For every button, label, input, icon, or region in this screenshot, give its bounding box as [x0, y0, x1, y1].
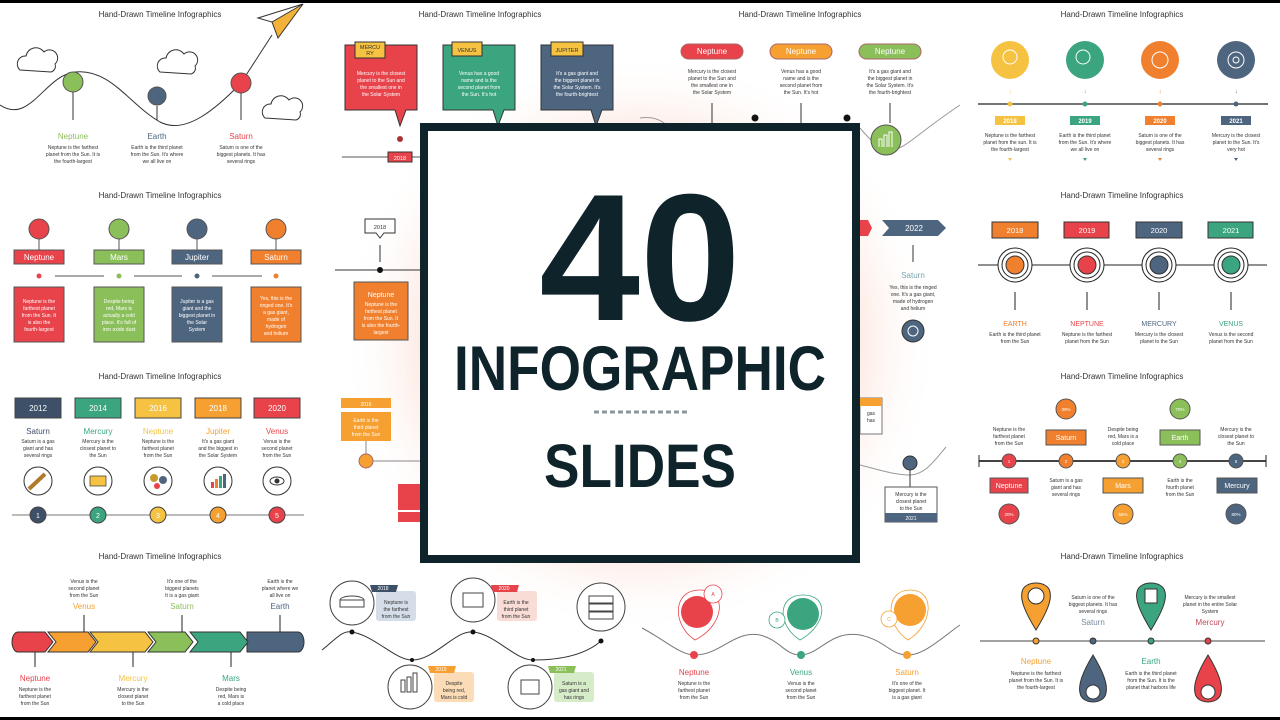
panel: speech bubbles top-mid-left: [342, 10, 613, 162]
panel: icon circles top-right: the fourth-largest: [991, 147, 1030, 153]
panel: chevron bar left: Venus is the: [70, 579, 98, 585]
panel: pills wave top-mid-right: the smallest one in: [691, 83, 733, 89]
panel: partial right-middle slides: has: [867, 418, 876, 424]
panel: percentage timeline right: Saturn: [1056, 435, 1076, 442]
panel: icon circles top-right: ↓: [1158, 89, 1162, 95]
panel: chevron bar left: It's one of the: [167, 579, 197, 585]
panel: wave timeline top-left: from the Sun. It's where: [131, 152, 184, 158]
panel: pills wave top-mid-right: Neptune: [697, 47, 728, 56]
panel: coin wave bottom-mid-left: 2019: [435, 667, 447, 673]
panel: percentage timeline right: 55%: [1118, 512, 1128, 517]
panel: wave timeline top-left: several rings: [227, 159, 256, 165]
panel: speech bubbles top-mid-left: the biggest planet in: [555, 78, 600, 84]
panel: icon boxes left: is also the: [28, 320, 50, 326]
panel: pills wave top-mid-right: Hand-Drawn Timeline Infographics: [739, 10, 861, 19]
panel: wave timeline top-left: planet from the Sun. It is: [46, 152, 101, 158]
panel: percentage timeline right: red, Mars is a: [1108, 434, 1138, 440]
panel: bubble wave bottom-mid-right: Neptune is the: [678, 681, 710, 687]
panel: pills wave top-mid-right: Neptune: [786, 47, 817, 56]
title: 40: 40: [539, 157, 741, 359]
panel: map pins right: Saturn is one of the: [1071, 595, 1115, 601]
panel: chevron bar left: closest planet: [118, 694, 149, 700]
panel: percentage timeline right: Mercury is the: [1220, 427, 1252, 433]
panel: bubble wave bottom-mid-right: farthest planet: [678, 688, 710, 694]
panel: percentage timeline right: Earth: [1172, 435, 1188, 442]
panel: speech bubbles top-mid-left: the fourth-brightest: [556, 92, 599, 98]
panel: partial right-middle slides: [860, 220, 946, 522]
panel: speech bubbles top-mid-left: JUPITER: [556, 48, 578, 54]
center title box: [424, 127, 856, 559]
panel: concentric circles right: Neptune is the farthest: [1062, 332, 1113, 338]
panel: icon boxes left: place. It's full of: [102, 320, 137, 326]
panel: year icons left: giant and has: [23, 446, 54, 452]
panel: chevron bar left: Despite being: [216, 687, 247, 693]
panel: pills wave top-mid-right: the fourth-brightest: [869, 90, 912, 96]
panel: partial right-middle slides: Saturn: [901, 271, 925, 280]
panel: wave timeline top-left: Neptune: [58, 132, 89, 141]
panel: icon boxes left: Despite being: [104, 299, 135, 305]
panel: year icons left: Neptune is the: [142, 439, 174, 445]
panel: icon boxes left: the Solar: [187, 320, 207, 326]
panel: pills wave top-mid-right: name and is the: [783, 76, 819, 82]
panel: year icons left: 2018: [209, 404, 227, 413]
panel: icon boxes left: Hand-Drawn Timeline Infographics: [99, 191, 221, 200]
panel: map pins right: Hand-Drawn Timeline Infographics: [1061, 552, 1183, 561]
panel: map pins right: planet that harbors life: [1126, 685, 1176, 691]
panel: percentage timeline right: giant and has: [1051, 485, 1082, 491]
panel: pills wave top-mid-right: planet to the Sun and: [688, 76, 736, 82]
title: SLIDES: SLIDES: [544, 432, 736, 500]
panel: partial left-middle slides: from the Sun: [352, 432, 381, 438]
panel: wave timeline top-left: the fourth-largest: [54, 159, 93, 165]
panel: chevron bar left: Neptune: [20, 674, 51, 683]
panel: speech bubbles top-mid-left: MERCU: [360, 45, 380, 51]
panel: year icons left: several rings: [24, 453, 53, 459]
panel: concentric circles right: planet from the Sun: [1065, 339, 1109, 345]
panel: bubble wave bottom-mid-right: Venus is the: [787, 681, 815, 687]
panel: icon circles top-right: several rings: [1146, 147, 1175, 153]
panel: speech bubbles top-mid-left: the Solar System. It's: [553, 85, 601, 91]
panel: map pins right: Mercury: [1196, 618, 1224, 627]
panel: bubble wave bottom-mid-right: second planet: [785, 688, 817, 694]
panel: map pins right: Mercury is the smallest: [1184, 595, 1236, 601]
panel: partial left-middle slides: Neptune is the: [365, 302, 397, 308]
panel: speech bubbles top-mid-left: the smallest one in: [360, 85, 402, 91]
panel: icon circles top-right: 2018: [1003, 119, 1017, 125]
panel: partial right-middle slides: gas: [867, 411, 876, 417]
panel: coin wave bottom-mid-left: from the Sun: [502, 614, 531, 620]
panel: pills wave top-mid-right: It's a gas giant and: [869, 69, 911, 75]
panel: year icons left: 2: [96, 513, 100, 520]
panel: icon circles top-right: 2019: [1078, 119, 1092, 125]
icon: paper plane: [258, 4, 303, 30]
panel: partial left-middle slides: farthest planet: [365, 309, 397, 315]
panel: partial left-middle slides: [335, 219, 420, 522]
panel: icon boxes left: iron oxide dust: [103, 327, 136, 333]
panel: year icons left: 2014: [89, 404, 107, 413]
panel: icon circles top-right: [978, 10, 1268, 161]
panel: icon boxes left: Neptune: [24, 253, 55, 262]
panel: year icons left: Mercury: [84, 427, 112, 436]
panel: chevron bar left: Mars: [222, 674, 240, 683]
panel: year icons left: Jupiter: [206, 427, 230, 436]
panel: chevron bar left: a cold place: [218, 701, 245, 707]
panel: pills wave top-mid-right: second planet from: [780, 83, 822, 89]
panel: coin wave bottom-mid-left: third planet: [504, 607, 529, 613]
panel: icon boxes left: Jupiter: [185, 253, 209, 262]
top black bar: [0, 0, 1280, 3]
panel: percentage timeline right: 5: [1235, 459, 1238, 464]
panel: coin wave bottom-mid-left: 2020: [498, 586, 510, 592]
panel: icon circles top-right: biggest planets. It has: [1136, 140, 1185, 146]
panel: percentage timeline right: Neptune: [996, 483, 1022, 490]
panel: year icons left: the Solar System: [199, 453, 237, 459]
panel: year icons left: [12, 372, 304, 523]
panel: chevron bar left: Hand-Drawn Timeline Infographics: [99, 552, 221, 561]
panel: pills wave top-mid-right: the Solar System. It's: [866, 83, 914, 89]
panel: year icons left: It's a gas giant: [202, 439, 235, 445]
panel: year icons left: second planet: [261, 446, 293, 452]
panel: concentric circles right: EARTH: [1003, 321, 1027, 328]
panel: percentage timeline right: from the Sun: [1166, 492, 1195, 498]
panel: icon boxes left: a gas giant,: [263, 310, 289, 316]
panel: concentric circles right: MERCURY: [1141, 321, 1177, 328]
panel: map pins right: Neptune is the farthest: [1011, 671, 1062, 677]
panel: chevron bar left: from the Sun: [21, 701, 50, 707]
panel: coin wave bottom-mid-left: Earth is the: [503, 600, 529, 606]
panel: bubble wave bottom-mid-right: It's one of the: [892, 681, 922, 687]
panel: icon boxes left: giant and the: [183, 306, 212, 312]
panel: year icons left: 2016: [149, 404, 167, 413]
panel: speech bubbles top-mid-left: name and is the: [461, 78, 497, 84]
panel: wave timeline top-left: biggest planets. It has: [217, 152, 266, 158]
panel: percentage timeline right: farthest planet: [993, 434, 1025, 440]
panel: partial right-middle slides: closest planet: [896, 499, 927, 505]
panel: chevron bar left: Mercury is the: [117, 687, 149, 693]
panel: speech bubbles top-mid-left: 2018: [394, 156, 406, 162]
panel: chevron bar left: Saturn: [170, 602, 194, 611]
panel: year icons left: Neptune: [143, 427, 174, 436]
panel: coin wave bottom-mid-left: has rings: [564, 695, 585, 701]
panel: concentric circles right: 2019: [1079, 226, 1095, 235]
panel: icon boxes left: [14, 191, 301, 342]
panel: percentage timeline right: 80%: [1231, 512, 1241, 517]
panel: percentage timeline right: from the Sun: [995, 441, 1024, 447]
panel: coin wave bottom-mid-left: 2018: [377, 586, 389, 592]
panel: wave timeline top-left: Saturn: [229, 132, 253, 141]
panel: concentric circles right: VENUS: [1219, 321, 1243, 328]
panel: icon circles top-right: very hot: [1227, 147, 1245, 153]
panel: speech bubbles top-mid-left: It's a gas giant and: [556, 71, 598, 77]
panel: bubble wave bottom-mid-right: A: [711, 592, 715, 598]
panel: pills wave top-mid-right: the biggest planet in: [868, 76, 913, 82]
panel: concentric circles right: 2018: [1007, 226, 1023, 235]
panel: partial right-middle slides: 2022: [905, 224, 923, 233]
panel: speech bubbles top-mid-left: Venus has a good: [459, 71, 499, 77]
panel: bubble wave bottom-mid-right: is a gas giant: [892, 695, 922, 701]
panel: partial left-middle slides: is also the fourth-: [362, 323, 401, 329]
panel: pills wave top-mid-right: Venus has a good: [781, 69, 821, 75]
panel: icon circles top-right: ↓: [1234, 89, 1238, 95]
panel: speech bubbles top-mid-left: Mercury is the closest: [357, 71, 406, 77]
panel: coin wave bottom-mid-left: gas giant and: [559, 688, 589, 694]
panel: partial right-middle slides: one. It's a gas giant,: [891, 292, 935, 298]
panel: bubble wave bottom-mid-right: B: [775, 618, 779, 624]
panel: bubble wave bottom-mid-right: C: [887, 617, 891, 623]
panel: coin wave bottom-mid-left: Saturn is a: [562, 681, 586, 687]
panel: wave timeline top-left: Saturn is one of the: [219, 145, 263, 151]
panel: year icons left: 3: [156, 513, 160, 520]
panel: map pins right: Earth: [1141, 657, 1161, 666]
panel: pills wave top-mid-right: the Solar System: [693, 90, 731, 96]
panel: chevron bar left: planet where we: [262, 586, 298, 592]
panel: icon boxes left: System: [189, 327, 205, 333]
panel: map pins right: biggest planets. It has: [1069, 602, 1118, 608]
panel: coin wave bottom-mid-left: Despite: [446, 681, 463, 687]
panel: percentage timeline right: Neptune is the: [993, 427, 1025, 433]
panel: partial right-middle slides: made of hydrogen: [893, 299, 933, 305]
panel: year icons left: from the Sun: [144, 453, 173, 459]
panel: partial right-middle slides: and helium: [901, 306, 925, 312]
panel: speech bubbles top-mid-left: second planet from: [458, 85, 500, 91]
panel: percentage timeline right: 20%: [1004, 512, 1014, 517]
panel: percentage timeline right: closest planet to: [1218, 434, 1254, 440]
panel: partial left-middle slides: Earth is the: [353, 418, 379, 424]
panel: chevron bar left: Venus: [73, 602, 95, 611]
panel: icon boxes left: biggest planet in: [179, 313, 215, 319]
panel: year icons left: Venus: [266, 427, 288, 436]
panel: icon boxes left: Saturn: [264, 253, 288, 262]
panel: partial right-middle slides: Mercury is the: [895, 492, 927, 498]
panel: map pins right: planet from the Sun. It is: [1009, 678, 1064, 684]
panel: year icons left: 2012: [29, 404, 47, 413]
panel: icon circles top-right: 2020: [1153, 119, 1167, 125]
panel: partial left-middle slides: largest: [373, 330, 389, 336]
panel: chevron bar left: It is a gas giant: [165, 593, 199, 599]
panel: percentage timeline right: 1: [1008, 459, 1011, 464]
panel: icon circles top-right: 2021: [1229, 119, 1243, 125]
panel: year icons left: Hand-Drawn Timeline Infographics: [99, 372, 221, 381]
panel: coin wave bottom-mid-left: [322, 578, 625, 709]
panel: speech bubbles top-mid-left: the Sun. It's hot: [462, 92, 497, 98]
panel: percentage timeline right: the Sun: [1227, 441, 1245, 447]
panel: partial left-middle slides: Neptune: [368, 292, 394, 299]
panel: bubble wave bottom-mid-right: Venus: [790, 668, 812, 677]
panel: icon boxes left: Neptune is the: [23, 299, 55, 305]
panel: icon boxes left: actually a cold: [103, 313, 135, 319]
panel: map pins right: planet in the entire Solar: [1183, 602, 1237, 608]
panel: concentric circles right: 2020: [1151, 226, 1167, 235]
panel: icon circles top-right: from the Sun. It's where: [1059, 140, 1112, 146]
panel: bubble wave bottom-mid-right: from the Sun: [680, 695, 709, 701]
panel: percentage timeline right: fourth planet: [1166, 485, 1195, 491]
panel: year icons left: 1: [36, 513, 40, 520]
panel: icon circles top-right: ↓: [1084, 89, 1086, 95]
panel: map pins right: System: [1202, 609, 1218, 615]
bottom black bar: [0, 717, 1280, 720]
panel: chevron bar left: from the Sun: [70, 593, 99, 599]
panel: year icons left: Saturn: [26, 427, 50, 436]
panel: icon circles top-right: Hand-Drawn Timeline Infographics: [1061, 10, 1183, 19]
panel: chevron bar left: Earth is the: [267, 579, 293, 585]
panel: chevron bar left: Earth: [270, 602, 290, 611]
panel: speech bubbles top-mid-left: VENUS: [458, 48, 477, 54]
panel: icon boxes left: red, Mars is: [106, 306, 133, 312]
panel: partial left-middle slides: 2018: [374, 225, 386, 231]
panel: chevron bar left: Neptune is the: [19, 687, 51, 693]
panel: bubble wave bottom-mid-right: Neptune: [679, 668, 710, 677]
panel: percentage timeline right: 30%: [1061, 407, 1071, 412]
panel: wave timeline top-left: Hand-Drawn Timeline Infographics: [99, 10, 221, 19]
panel: partial left-middle slides: third planet: [354, 425, 379, 431]
panel: map pins right: from the Sun. It is the: [1127, 678, 1175, 684]
panel: year icons left: from the Sun: [263, 453, 292, 459]
panel: coin wave bottom-mid-left: 2021: [555, 667, 567, 673]
panel: bubble wave bottom-mid-right: from the Sun: [787, 695, 816, 701]
panel: concentric circles right: Hand-Drawn Timeline Infographics: [1061, 191, 1183, 200]
panel: icon circles top-right: Mercury is the closest: [1212, 133, 1261, 139]
panel: percentage timeline right: Despite being: [1108, 427, 1139, 433]
panel: year icons left: closest planet to: [80, 446, 116, 452]
panel: pills wave top-mid-right: Mercury is the closest: [688, 69, 737, 75]
panel: map pins right: several rings: [1079, 609, 1108, 615]
panel: pills wave top-mid-right: Neptune: [875, 47, 906, 56]
title: INFOGRAPHIC: INFOGRAPHIC: [454, 334, 826, 404]
panel: speech bubbles top-mid-left: Hand-Drawn Timeline Infographics: [419, 10, 541, 19]
panel: concentric circles right: planet to the Sun: [1140, 339, 1178, 345]
panel: speech bubbles top-mid-left: the Solar System: [362, 92, 400, 98]
panel: percentage timeline right: 70%: [1175, 407, 1185, 412]
panel: partial left-middle slides: 2016: [360, 402, 372, 408]
panel: icon boxes left: from the Sun. It: [22, 313, 57, 319]
panel: icon boxes left: ringed one. It's: [260, 303, 293, 309]
panel: percentage timeline right: [979, 372, 1266, 524]
panel: icon boxes left: Yes, this is the: [260, 296, 292, 302]
panel: map pins right: [980, 552, 1265, 702]
panel: coin wave bottom-mid-left: Neptune is: [384, 600, 408, 606]
panel: coin wave bottom-mid-left: Mars is cold: [441, 695, 468, 701]
panel: icon circles top-right: Earth is the third planet: [1059, 133, 1111, 139]
panel: pills wave top-mid-right: the Sun. It's hot: [784, 90, 819, 96]
panel: concentric circles right: Earth is the third planet: [989, 332, 1041, 338]
panel: coin wave bottom-mid-left: the farthest: [383, 607, 409, 613]
panel: percentage timeline right: 4: [1179, 459, 1182, 464]
panel: concentric circles right: NEPTUNE: [1070, 321, 1104, 328]
panel: year icons left: 2020: [268, 404, 286, 413]
panel: chevron bar left: [12, 552, 304, 707]
panel: wave timeline top-left: Earth is the third planet: [131, 145, 183, 151]
panel: year icons left: Saturn is a gas: [21, 439, 55, 445]
panel: partial right-middle slides: 2021: [905, 516, 917, 522]
panel: percentage timeline right: Hand-Drawn Timeline Infographics: [1061, 372, 1183, 381]
panel: percentage timeline right: Mars: [1115, 483, 1131, 490]
panel: map pins right: Saturn: [1081, 618, 1105, 627]
panel: wave timeline top-left: Neptune is the farthest: [48, 145, 99, 151]
panel: partial right-middle slides: Yes, this is the ringed: [889, 285, 937, 291]
clouds: [17, 48, 303, 120]
panel: icon boxes left: Mars: [110, 253, 128, 262]
panel: chevron bar left: to the Sun: [122, 701, 145, 707]
panel: coin wave bottom-mid-left: from the Sun: [382, 614, 411, 620]
panel: speech bubbles top-mid-left: RY: [366, 51, 374, 57]
panel: icon boxes left: fourth-largest: [24, 327, 54, 333]
panel: bubble wave bottom-mid-right: [642, 585, 960, 701]
panel: map pins right: the fourth-largest: [1017, 685, 1056, 691]
panel: icon circles top-right: we all live on: [1071, 147, 1100, 153]
panel: year icons left: the Sun: [89, 453, 107, 459]
panel: percentage timeline right: 2: [1065, 459, 1068, 464]
glow behind center box: [340, 53, 940, 633]
panel: chevron bar left: biggest planets: [165, 586, 199, 592]
panel: chevron bar left: second planet: [68, 586, 100, 592]
panel: year icons left: Mercury is the: [82, 439, 114, 445]
panel: icon circles top-right: Neptune is the farthest: [985, 133, 1036, 139]
panel: percentage timeline right: Earth is the: [1167, 478, 1193, 484]
panel: year icons left: 4: [216, 513, 220, 520]
panel: icon circles top-right: planet from the sun. It is: [983, 140, 1037, 146]
panel: concentric circles right: Venus is the second: [1209, 332, 1254, 338]
panel: year icons left: and the biggest in: [198, 446, 238, 452]
panel: pills wave top-mid-right: [640, 10, 960, 155]
panel: icon circles top-right: Saturn is one of the: [1138, 133, 1182, 139]
panel: icon circles top-right: planet to the Sun. It's: [1213, 140, 1260, 146]
panel: icon boxes left: and helium: [264, 331, 288, 337]
panel: percentage timeline right: 3: [1122, 459, 1125, 464]
panel: year icons left: farthest planet: [142, 446, 174, 452]
panel: speech bubbles top-mid-left: planet to the Sun and: [357, 78, 405, 84]
panel: percentage timeline right: cold place: [1112, 441, 1134, 447]
panel: icon boxes left: hydrogen: [266, 324, 287, 330]
panel: bubble wave bottom-mid-right: Saturn: [895, 668, 919, 677]
panel: concentric circles right: [978, 191, 1267, 345]
panel: percentage timeline right: Saturn is a gas: [1049, 478, 1083, 484]
panel: concentric circles right: 2021: [1223, 226, 1239, 235]
panel: icon boxes left: farthest planet: [23, 306, 55, 312]
panel: wave timeline top-left: we all live on: [143, 159, 172, 165]
panel: icon boxes left: made of: [267, 317, 286, 323]
panel: wave timeline top-left: [0, 4, 303, 165]
panel: concentric circles right: Mercury is the closest: [1135, 332, 1184, 338]
panel: chevron bar left: Mercury: [119, 674, 147, 683]
panel: partial right-middle slides: to the Sun: [900, 506, 923, 512]
panel: chevron bar left: red, Mars is: [218, 694, 245, 700]
panel: map pins right: Neptune: [1021, 657, 1052, 666]
panel: chevron bar left: all live on: [270, 593, 291, 599]
panel: map pins right: Earth is the third planet: [1125, 671, 1177, 677]
panel: wave timeline top-left: Earth: [147, 132, 167, 141]
panel: percentage timeline right: several rings: [1052, 492, 1081, 498]
panel: year icons left: Venus is the: [263, 439, 291, 445]
panel: partial left-middle slides: from the Sun. It: [364, 316, 399, 322]
panel: chevron bar left: farthest planet: [19, 694, 51, 700]
panel: coin wave bottom-mid-left: being red,: [443, 688, 465, 694]
panel: percentage timeline right: Mercury: [1224, 483, 1250, 490]
panel: concentric circles right: from the Sun: [1001, 339, 1030, 345]
panel: concentric circles right: planet from the Sun: [1209, 339, 1253, 345]
panel: icon boxes left: Jupiter is a gas: [180, 299, 214, 305]
panel: icon circles top-right: ↓: [1008, 89, 1012, 95]
panel: year icons left: 5: [275, 513, 279, 520]
panel: bubble wave bottom-mid-right: biggest planet. It: [889, 688, 926, 694]
